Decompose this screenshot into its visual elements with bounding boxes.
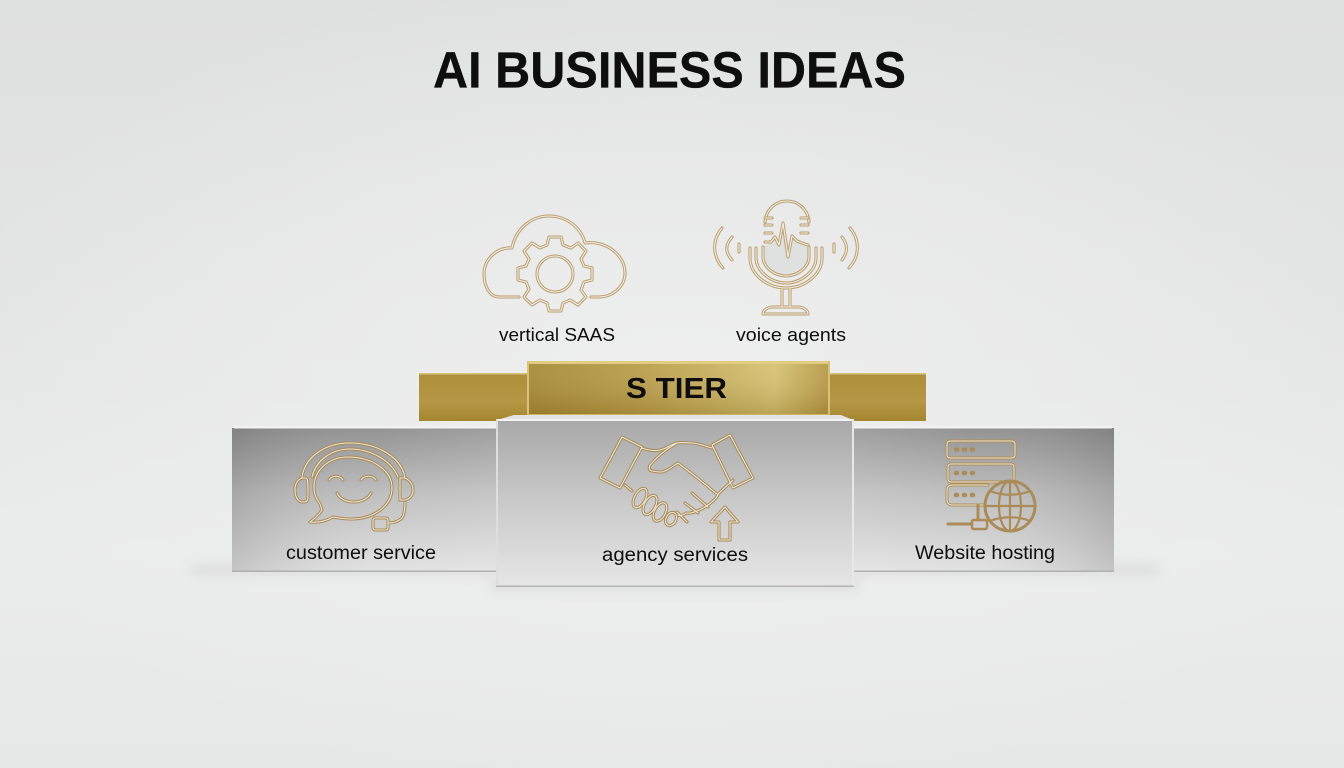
label: voice agents: voice agents <box>736 324 846 345</box>
gold S tier plate <box>527 361 830 417</box>
label: Website hosting: Website hosting <box>915 543 1055 564</box>
icon: cloud with gear <box>484 216 625 311</box>
icon: smiling chat bubble with headset <box>295 443 413 530</box>
floor shadow <box>190 566 1160 590</box>
label: customer service: customer service <box>286 543 436 564</box>
label: agency services: agency services <box>602 545 748 566</box>
icon: microphone with sound waves <box>715 201 857 314</box>
icon: handshake with up arrow <box>600 435 753 540</box>
title: AI BUSINESS IDEAS <box>433 42 906 98</box>
label: vertical SAAS: vertical SAAS <box>499 324 615 345</box>
panel: center podium, agency services <box>496 415 854 587</box>
label: S TIER: S TIER <box>626 373 727 405</box>
panel: left podium, customer service <box>232 426 498 572</box>
icon: server racks with globe <box>947 441 1035 531</box>
panel: right podium, website hosting <box>854 426 1114 572</box>
gold back bar <box>419 373 926 421</box>
